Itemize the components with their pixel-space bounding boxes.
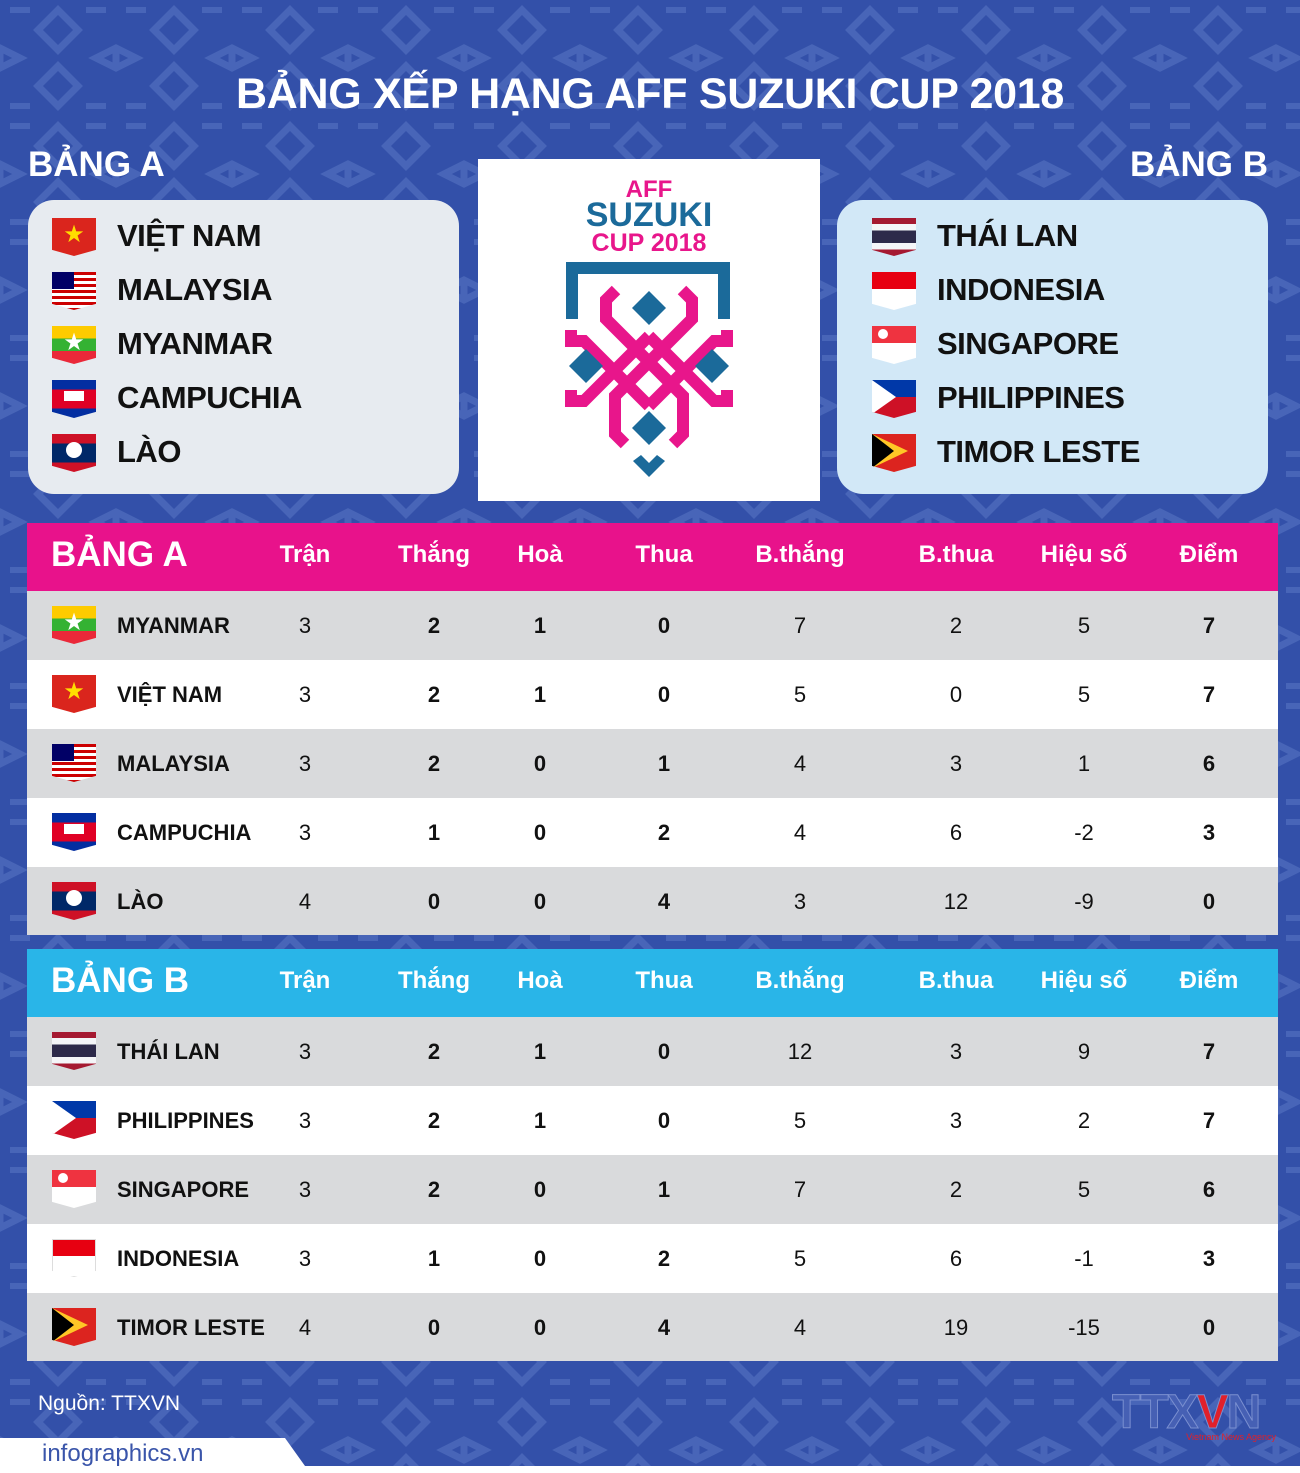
row: Indonesia: 3 [1203,1246,1215,1271]
row: Campuchia: CAMPUCHIA [117,820,251,845]
panel: group A teams: ★ [63,329,85,356]
header: group A: Hoà [517,541,563,568]
row: Philippines [27,1086,1278,1155]
panel: group B teams: SINGAPORE [937,326,1119,361]
header: group B: Thua [635,967,693,994]
row: Indonesia: 6 [950,1246,962,1271]
team: Philippines [872,380,1124,418]
panel: group B teams: TIMOR LESTE [937,434,1140,469]
team: Singapore [872,326,1119,364]
source note: Nguồn: TTXVN [38,1392,180,1415]
header: group A: Trận [280,541,330,568]
row: Viet Nam: 5 [1078,682,1090,707]
row: Indonesia: 3 [299,1246,311,1271]
team: Myanmar [52,326,273,364]
row: Singapore [27,1155,1278,1224]
panel: group B teams: PHILIPPINES [937,380,1124,415]
panel: group A teams: MALAYSIA [117,272,272,307]
header: group B: B.thắng [755,967,845,994]
heading: Bang A: BẢNG A [28,145,165,184]
row: Myanmar: 3 [299,613,311,638]
row: Singapore: 2 [428,1177,440,1202]
row: Timor Leste: 4 [794,1315,806,1340]
team: Malaysia [52,272,272,310]
row: Philippines: 2 [1078,1108,1090,1133]
header: group B: Thắng [398,967,470,994]
row: Timor Leste: 4 [658,1315,670,1340]
row: Myanmar [27,591,1278,660]
row: Viet Nam: 5 [794,682,806,707]
row: Myanmar: 0 [658,613,670,638]
row: Singapore: 5 [1078,1177,1090,1202]
panel: group A teams: ★ [63,221,85,248]
header: group B: Trận [280,967,330,994]
team: Viet Nam [52,218,261,256]
row: Philippines: 3 [950,1108,962,1133]
header: group B: Điểm [1180,967,1238,994]
header: group A: Thắng [398,541,470,568]
team: Campuchia [52,380,302,418]
row: Timor Leste: 4 [299,1315,311,1340]
row: Timor Leste: 19 [944,1315,968,1340]
row: Lao: 0 [428,889,440,914]
row: Viet Nam: 0 [950,682,962,707]
row: Myanmar: ★ [63,609,85,636]
team: Indonesia [872,272,1105,310]
logo: TTXVN: TTXVN [1112,1386,1259,1439]
logo: AFF Suzuki Cup 2018: CUP 2018 [592,229,707,257]
row: Malaysia: 3 [950,751,962,776]
row: Lao: 0 [534,889,546,914]
row: Campuchia: -2 [1074,820,1094,845]
header: group B: Hiệu số [1041,967,1127,994]
header: group B: B.thua [919,967,993,994]
row: Timor Leste: TIMOR LESTE [117,1315,265,1340]
panel: group B teams: INDONESIA [937,272,1105,307]
row: Myanmar: 7 [1203,613,1215,638]
row: Viet Nam: 3 [299,682,311,707]
row: Philippines: 0 [658,1108,670,1133]
row: Timor Leste: 0 [1203,1315,1215,1340]
row: Philippines: 5 [794,1108,806,1133]
row: Myanmar: 5 [1078,613,1090,638]
footer bar [0,1438,1300,1473]
row: Viet Nam: 7 [1203,682,1215,707]
title: BẢNG XẾP HẠNG AFF SUZUKI CUP 2018 [236,70,1064,118]
panel: group A teams: VIỆT NAM [117,218,261,253]
row: Malaysia: 6 [1203,751,1215,776]
header: group B [27,949,1278,1017]
row: Indonesia: 1 [428,1246,440,1271]
row: Indonesia [27,1224,1278,1293]
row: Singapore: 3 [299,1177,311,1202]
row: Thai Lan: THÁI LAN [117,1039,220,1064]
row: Myanmar: 2 [428,613,440,638]
row: Lao: 3 [794,889,806,914]
row: Viet Nam: 0 [658,682,670,707]
logo: AFF Suzuki Cup 2018: AFF [626,176,672,203]
row: Viet Nam: VIỆT NAM [117,682,222,707]
row: Thai Lan: 12 [788,1039,812,1064]
logo: AFF Suzuki Cup 2018 [478,159,820,501]
row: Singapore: SINGAPORE [117,1177,249,1202]
row: Singapore: 6 [1203,1177,1215,1202]
logo: AFF Suzuki Cup 2018: SUZUKI [586,196,712,234]
row: Campuchia: 3 [299,820,311,845]
row: Indonesia: 2 [658,1246,670,1271]
row: Malaysia: 1 [658,751,670,776]
row: Singapore: 2 [950,1177,962,1202]
panel: group B teams [837,200,1268,494]
row: Lao [27,867,1278,935]
row: Thai Lan: 7 [1203,1039,1215,1064]
row: Lao: -9 [1074,889,1094,914]
row: Malaysia: MALAYSIA [117,751,230,776]
panel: group A teams [28,200,459,494]
row: Timor Leste: 0 [534,1315,546,1340]
row: Timor Leste: 0 [428,1315,440,1340]
row: Lao: 4 [658,889,670,914]
row: Indonesia: 0 [534,1246,546,1271]
row: Indonesia: 5 [794,1246,806,1271]
row: Viet Nam [27,660,1278,729]
row: Malaysia: 0 [534,751,546,776]
heading: Bang B: BẢNG B [1130,145,1268,184]
row: Malaysia: 4 [794,751,806,776]
row: Thai Lan: 9 [1078,1039,1090,1064]
row: Lao: 0 [1203,889,1215,914]
header: group A: BẢNG A [51,535,188,574]
row: Viet Nam: 2 [428,682,440,707]
row: Philippines: PHILIPPINES [117,1108,254,1133]
row: Campuchia: 0 [534,820,546,845]
row: Philippines: 2 [428,1108,440,1133]
row: Viet Nam: 1 [534,682,546,707]
row: Campuchia: 4 [794,820,806,845]
team: Thai Lan [872,218,1078,256]
row: Malaysia: 3 [299,751,311,776]
row: Campuchia: 1 [428,820,440,845]
logo: TTXVN: Vietnam News Agency [1186,1432,1276,1442]
row: Malaysia: 1 [1078,751,1090,776]
row: Philippines: 3 [299,1108,311,1133]
row: Lao: 12 [944,889,968,914]
row: Timor Leste [27,1293,1278,1361]
panel: group A teams: LÀO [117,434,181,469]
row: Lao: LÀO [117,889,163,914]
panel: group A teams: CAMPUCHIA [117,380,302,415]
row: Myanmar: 1 [534,613,546,638]
panel: group B teams: THÁI LAN [937,218,1078,253]
row: Thai Lan: 3 [950,1039,962,1064]
row: Thai Lan: 1 [534,1039,546,1064]
row: Singapore: 0 [534,1177,546,1202]
header: group B: Hoà [517,967,563,994]
table: group A standings [27,523,1278,935]
row: Lao: 4 [299,889,311,914]
row: Indonesia: -1 [1074,1246,1094,1271]
row: Malaysia: 2 [428,751,440,776]
row: Singapore: 1 [658,1177,670,1202]
team: Lao [52,434,181,472]
header: group A: Điểm [1180,541,1238,568]
team: Timor Leste [872,434,1140,472]
row: Myanmar: 7 [794,613,806,638]
panel: group A teams: MYANMAR [117,326,273,361]
row: Indonesia: INDONESIA [117,1246,239,1271]
row: Philippines: 1 [534,1108,546,1133]
row: Myanmar: 2 [950,613,962,638]
table: group B standings [27,949,1278,1361]
row: Singapore: 7 [794,1177,806,1202]
row: Campuchia: 2 [658,820,670,845]
row: Thai Lan [27,1017,1278,1086]
row: Viet Nam: ★ [63,678,85,705]
row: Malaysia [27,729,1278,798]
row: Myanmar: MYANMAR [117,613,230,638]
row: Timor Leste: -15 [1068,1315,1100,1340]
row: Philippines: 7 [1203,1108,1215,1133]
header: group A: B.thua [919,541,993,568]
row: Campuchia: 6 [950,820,962,845]
header: group A: B.thắng [755,541,845,568]
row: Thai Lan: 0 [658,1039,670,1064]
header: group B: BẢNG B [51,961,189,1000]
row: Campuchia [27,798,1278,867]
header: group A: Hiệu số [1041,541,1127,568]
footer url: infographics.vn [42,1440,203,1467]
row: Thai Lan: 3 [299,1039,311,1064]
row: Thai Lan: 2 [428,1039,440,1064]
header: group A: Thua [635,541,693,568]
header: group A [27,523,1278,591]
row: Campuchia: 3 [1203,820,1215,845]
